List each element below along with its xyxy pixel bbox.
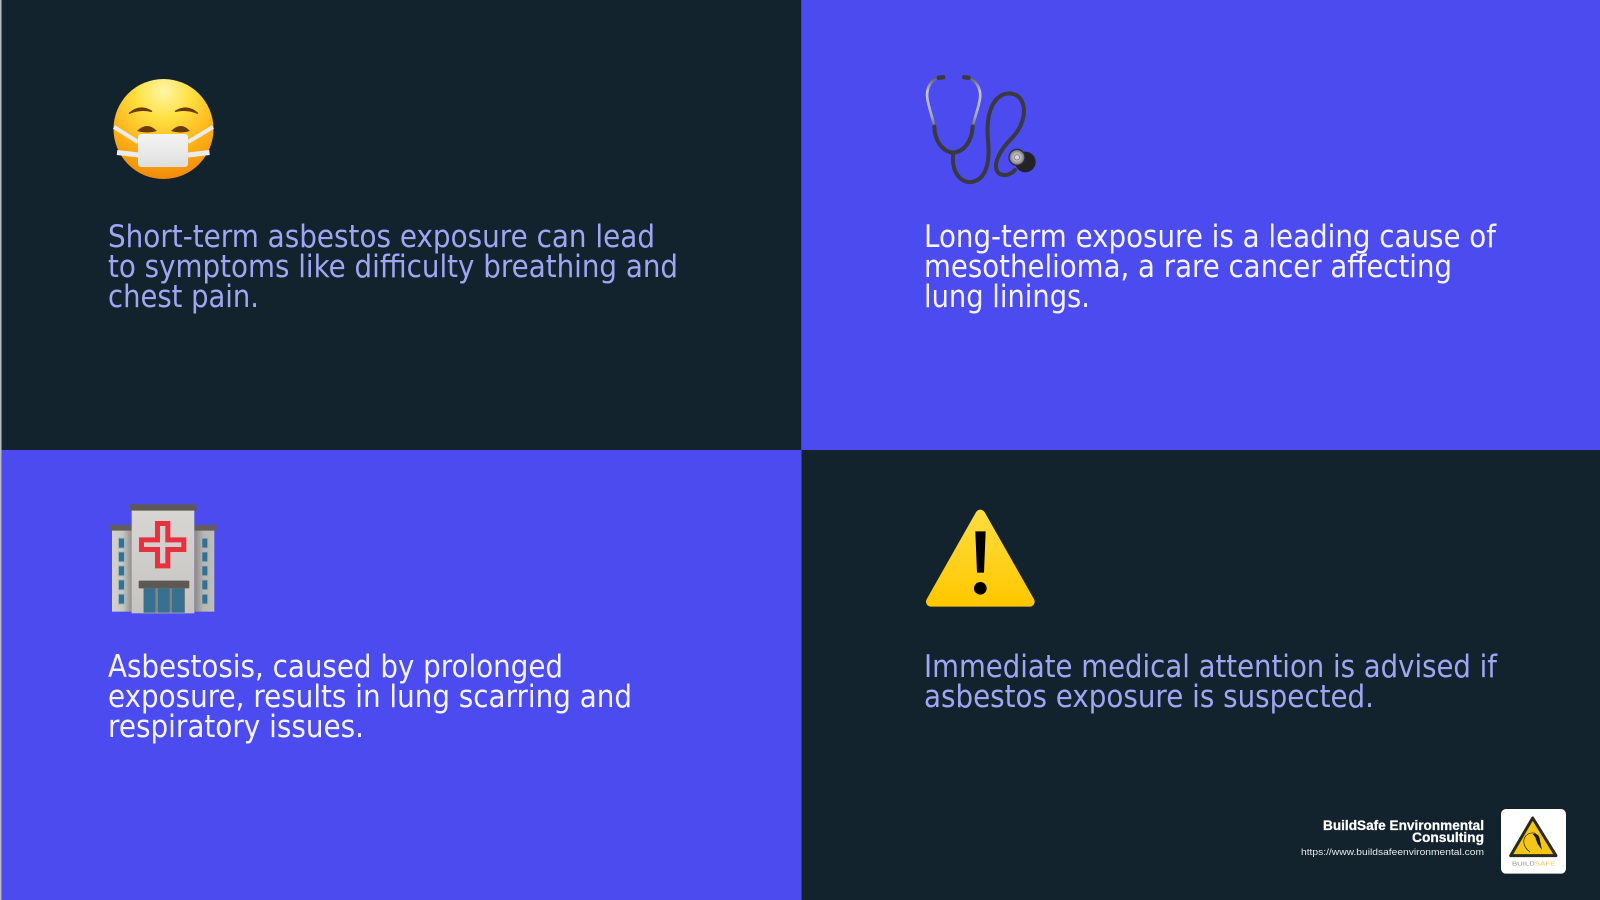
company url: https://www.buildsafeenvironmental.com	[1301, 847, 1484, 858]
company name: BuildSafe Environmental	[1323, 818, 1484, 833]
text: medical attention: Immediate medical attention is advised if	[924, 649, 1498, 685]
text: short-term exposure	[108, 219, 678, 315]
text: long-term exposure: lung linings.	[924, 279, 1090, 315]
text: medical attention	[924, 649, 1498, 715]
text: short-term exposure: Short-term asbestos exposure can lead	[108, 219, 655, 255]
icon: hospital	[110, 504, 217, 613]
left edge strip	[0, 0, 2, 900]
text: long-term exposure: mesothelioma, a rare cancer affecting	[924, 249, 1452, 285]
text: asbestosis: exposure, results in lung scarring and	[108, 679, 632, 715]
text: long-term exposure: Long-term exposure is a leading cause of	[924, 219, 1497, 255]
text: long-term exposure	[924, 219, 1497, 315]
text: short-term exposure: chest pain.	[108, 279, 259, 315]
text: asbestosis: respiratory issues.	[108, 709, 364, 745]
text: asbestosis	[108, 649, 632, 745]
text: asbestosis: Asbestosis, caused by prolonged	[108, 649, 563, 685]
panel: short-term symptoms	[2, 0, 801, 450]
panel: medical attention	[802, 450, 1600, 900]
company name: Consulting	[1412, 830, 1484, 845]
icon: stethoscope	[927, 75, 1036, 182]
text: medical attention: asbestos exposure is suspected.	[924, 679, 1374, 715]
panel: asbestosis	[2, 450, 802, 900]
text: short-term exposure: to symptoms like difficulty breathing and	[108, 249, 678, 285]
logo: BUILD SAFE	[1512, 862, 1556, 868]
panel: long-term exposure	[801, 0, 1600, 450]
icon: warning sign	[931, 515, 1030, 602]
logo	[1501, 809, 1566, 874]
footer: company branding	[1301, 809, 1566, 874]
icon: face with medical mask	[114, 79, 214, 179]
company name	[1323, 818, 1484, 845]
